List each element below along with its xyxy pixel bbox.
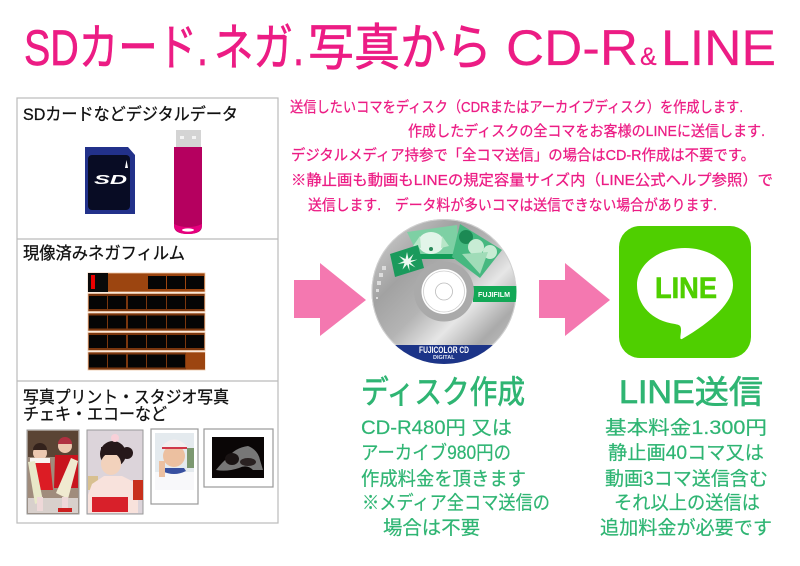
text block: LINE fees: 静止画40コマ又は [608,442,764,464]
title: CD-R [506,20,638,76]
text block: disc fees: アーカイブ980円の [361,441,511,464]
title [24,20,776,76]
disc artwork: children photo [452,224,502,278]
heading: digital data: SDカードなどデジタルデータ [23,104,238,124]
instructions text block: デジタルメディア持参で「全コマ送信」の場合はCD-R作成は不要です。 [291,146,755,164]
text block: LINE fees [600,417,772,539]
icon: USB stick [174,130,202,234]
icon: SD card [85,147,135,214]
title: LINE [661,20,776,76]
disc artwork: daisy photo [390,245,424,277]
text block: disc fees [361,418,550,539]
image: FUJICOLOR CD disc: FUJICOLOR CD [419,345,469,355]
instructions text block: 送信します. データ料が多いコマは送信できない場合があります. [308,196,717,214]
heading: disc creation: ディスク作成 [361,374,525,410]
image: negative film strips [88,273,205,370]
heading: LINE send: LINE送信 [619,374,763,410]
heading: prints: チェキ・エコーなど [23,405,167,424]
LINE logo word: LINE [655,272,717,305]
title: SDカード. [24,20,208,76]
text block: LINE fees: それ以上の送信は [614,492,760,514]
instructions text block: 送信したいコマをディスク（CDRまたはアーカイブディスク）を作成します. [290,98,743,116]
speech bubble [637,248,733,339]
title: 写真から [308,20,492,76]
text block: disc fees: 作成料金を頂きます [361,468,526,490]
heading: prints [23,388,229,424]
instructions text block: 作成したディスクの全コマをお客様のLINEに送信します. [408,122,765,140]
text block: disc fees: ※メディア全コマ送信の [362,492,550,514]
title: & [640,43,657,71]
text block: LINE fees: 基本料金1.300円 [605,417,767,439]
icon: LINE app [619,226,751,358]
text block: disc fees: 場合は不要 [383,517,480,539]
disc artwork: dog photo [407,225,459,259]
arrow: disc to LINE [539,263,610,336]
instructions text block [290,98,773,214]
arrow: media to disc [294,263,366,336]
instructions text block: ※静止画も動画もLINEの規定容量サイズ内（LINE公式ヘルプ参照）で [291,172,773,189]
photo: two girls in red coats [27,430,79,514]
text block: LINE fees: 追加料金が必要です [600,517,772,539]
image: FUJICOLOR CD disc: FUJIFILM [478,290,510,299]
icon: SD card: SD [94,172,128,187]
image: FUJICOLOR CD disc: DIGITAL [433,355,455,361]
text block: LINE fees: 動画3コマ送信含む [605,468,768,490]
image: FUJICOLOR CD disc [372,219,516,364]
photo: instant print of a boy [151,429,198,504]
title: ネガ. [214,20,304,76]
photo: girl in kimono [87,430,143,514]
photo: ultrasound print [204,429,273,487]
heading: negative film: 現像済みネガフィルム [23,244,185,263]
heading: prints: 写真プリント・スタジオ写真 [23,388,229,407]
panel: source media [17,98,278,523]
text block: disc fees: CD-R480円 又は [361,418,512,439]
